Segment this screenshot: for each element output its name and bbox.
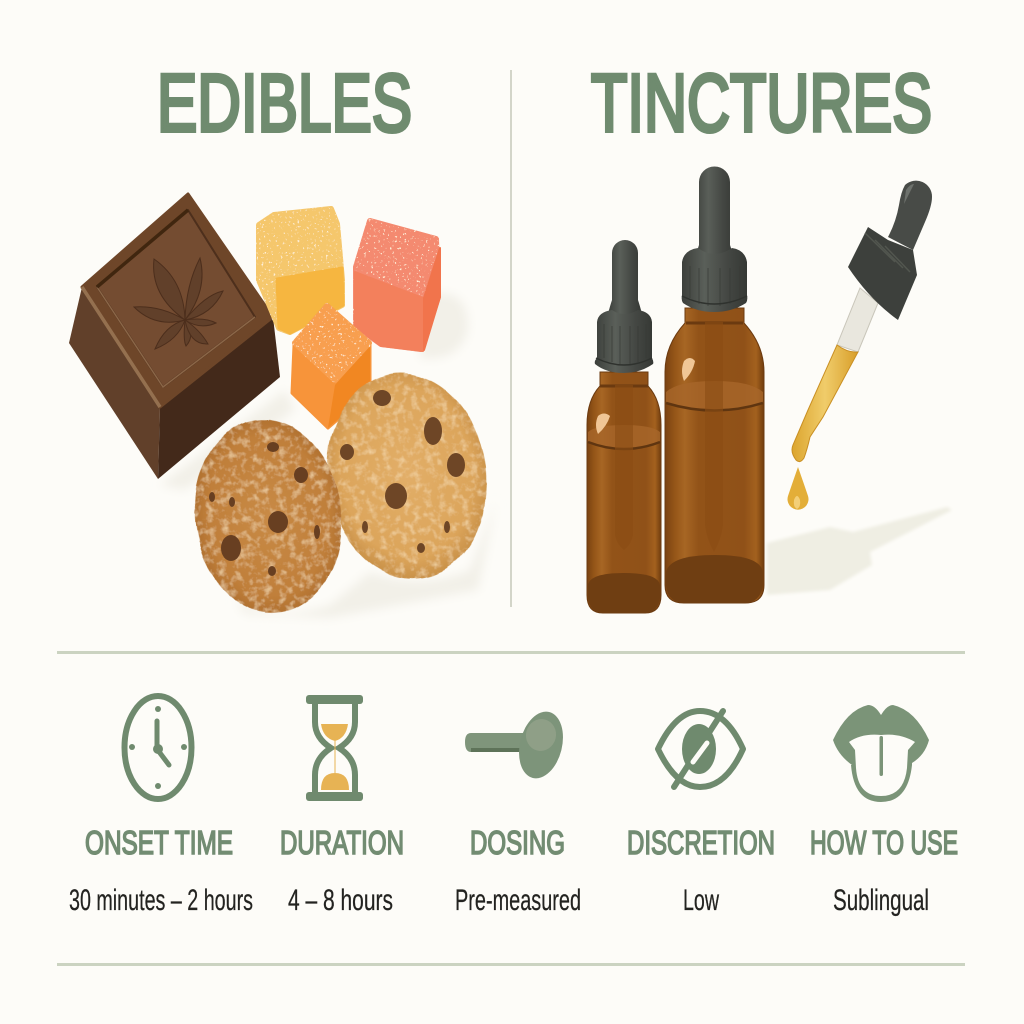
icon: measuring spoon <box>465 707 570 783</box>
oil drop <box>788 467 808 510</box>
metric: duration <box>280 695 404 917</box>
label: DURATION <box>280 824 404 861</box>
panel: edibles illustration <box>69 194 500 620</box>
icon: crossed-out eye <box>658 711 743 787</box>
value: 4 – 8 hours <box>288 884 393 917</box>
small dropper bulb and cap <box>595 240 653 373</box>
dropper <box>788 181 932 510</box>
title: edibles: EDIBLES <box>157 58 412 149</box>
icon: clock <box>124 696 192 799</box>
chocolate square <box>69 194 280 479</box>
bottle: large <box>665 166 764 603</box>
icon: hourglass <box>306 695 363 801</box>
cannabis leaf emboss <box>134 258 223 349</box>
gummy: yellow <box>259 209 343 333</box>
bottle: small <box>587 240 661 613</box>
label: DOSING <box>470 824 565 861</box>
label: HOW TO USE <box>810 824 958 861</box>
icon: lips and tongue <box>833 705 929 802</box>
value: Sublingual <box>833 884 929 917</box>
large dropper bulb and cap <box>682 166 747 312</box>
cast shadow <box>767 507 952 595</box>
metric: onset time <box>69 696 253 917</box>
value: Low <box>683 884 719 917</box>
label: DISCRETION <box>627 824 775 861</box>
value: 30 minutes – 2 hours <box>69 884 253 917</box>
metric: how to use <box>810 705 958 917</box>
metric: discretion <box>627 711 775 917</box>
panel: tinctures illustration <box>587 166 952 613</box>
value: Pre-measured <box>455 884 581 917</box>
gummy: coral <box>355 221 440 351</box>
metric: dosing <box>455 707 581 917</box>
gummy: orange <box>292 306 370 428</box>
label: ONSET TIME <box>85 824 233 861</box>
cookie: left <box>185 412 351 620</box>
cookie: right <box>314 363 500 589</box>
soft shadows <box>160 293 496 618</box>
